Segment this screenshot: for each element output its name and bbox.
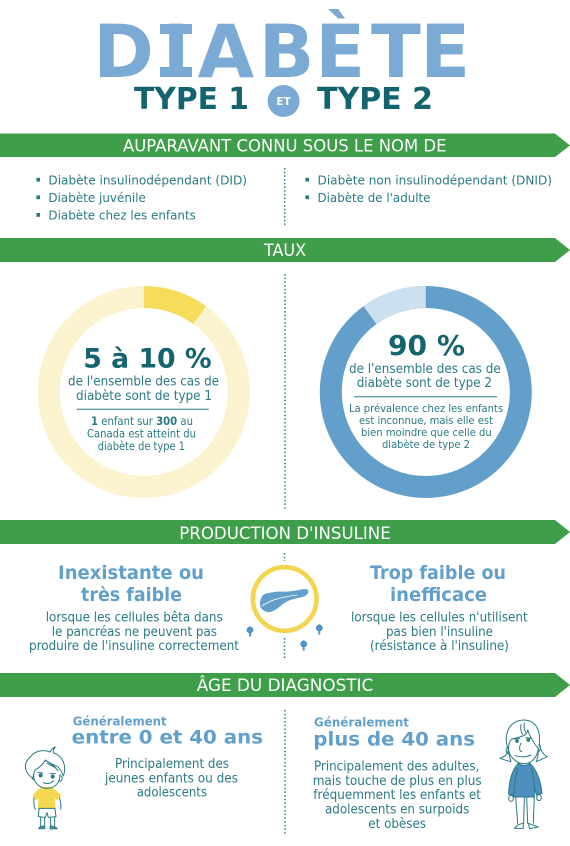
icon: insulin drop bottom xyxy=(300,640,307,650)
text: share of cases type 2 xyxy=(349,362,501,391)
heading: trop faible ou inefficace xyxy=(370,562,506,606)
text: principally adults: et obèses xyxy=(368,817,426,832)
text: prevalence type 1: diabète de type 1 xyxy=(98,439,185,453)
icon: boy xyxy=(25,747,65,829)
text: prevalence type 2 xyxy=(349,402,503,451)
subtitle: type 1: TYPE 1 xyxy=(134,82,249,117)
text: principally children: Principalement des xyxy=(115,757,229,772)
text: principally adults: mais touche de plus en plus xyxy=(313,774,482,789)
badge: et: ET xyxy=(276,96,292,108)
icon: woman xyxy=(500,720,547,829)
heading: trop faible ou inefficace: Trop faible ou xyxy=(370,562,506,584)
panel: insulin type 1 xyxy=(29,562,239,654)
text: share of cases type 1: diabète sont de type 1 xyxy=(76,388,212,404)
text: cause type 2 xyxy=(351,611,528,654)
subtitle: type 2: TYPE 2 xyxy=(317,82,433,117)
text: principally adults: fréquemment les enfants et xyxy=(313,788,481,803)
panel: former names type 2: Diabète de l'adulte xyxy=(318,191,431,206)
text: prevalence type 2: diabète de type 2 xyxy=(382,438,470,451)
icon: insulin drop right xyxy=(316,624,323,634)
text: cause type 2: lorsque les cellules n'utilisent xyxy=(351,611,528,626)
heading: inexistante ou très faible: Inexistante ou xyxy=(58,562,204,584)
text: prevalence type 1: Canada est atteint du xyxy=(87,426,196,440)
heading: inexistante ou très faible: très faible xyxy=(81,584,182,606)
text: principally children xyxy=(104,757,238,801)
text: cause type 1 xyxy=(29,611,239,654)
banner: auparavant connu sous le nom de xyxy=(0,134,570,157)
text: cause type 1: produire de l'insuline correctement xyxy=(29,639,239,654)
panel: former names type 2 xyxy=(305,174,552,206)
title: DIABÈTE: DIABÈTE xyxy=(93,9,470,95)
text: principally adults xyxy=(313,760,482,832)
label: généralement: Généralement xyxy=(73,714,167,729)
icon: insulin drop left xyxy=(246,626,254,636)
text: share of cases type 2: de l'ensemble des cas de xyxy=(349,362,501,377)
banner: production d'insuline: PRODUCTION D'INSULINE xyxy=(179,524,391,544)
banner: taux: TAUX xyxy=(263,241,306,261)
banner: âge du diagnostic: ÂGE DU DIAGNOSTIC xyxy=(197,674,373,696)
text: cause type 2: (résistance à l'insuline) xyxy=(370,639,509,654)
text: principally children: adolescents xyxy=(137,786,207,801)
heading: inexistante ou très faible xyxy=(58,562,204,606)
panel: former names type 1 xyxy=(36,174,247,224)
panel: former names type 2: Diabète non insulinodépendant (DNID) xyxy=(318,174,552,188)
panel: age type 1 xyxy=(72,714,263,801)
heading: plus de 40 ans: plus de 40 ans xyxy=(313,730,475,751)
banner: âge du diagnostic xyxy=(0,673,570,697)
text: prevalence type 1 xyxy=(87,414,196,453)
stat: 90 %: 90 % xyxy=(388,329,465,362)
text: prevalence type 1: 1 enfant sur 300 au xyxy=(91,414,193,428)
panel: former names type 1: Diabète insulinodépendant (DID) xyxy=(48,174,247,188)
text: share of cases type 1: de l'ensemble des cas de xyxy=(68,375,219,390)
banner: production d'insuline xyxy=(0,520,570,544)
panel: age type 2 xyxy=(313,715,482,832)
banner: auparavant connu sous le nom de: AUPARAVANT CONNU SOUS LE NOM DE xyxy=(123,136,446,156)
text: cause type 1: lorsque les cellules bêta dans xyxy=(46,611,223,626)
text: cause type 2: pas bien l'insuline xyxy=(386,625,493,640)
text: cause type 1: le pancréas ne peuvent pas xyxy=(52,625,217,640)
heading: entre 0 et 40 ans: entre 0 et 40 ans xyxy=(72,727,263,748)
title block xyxy=(93,9,470,117)
text: principally adults: Principalement des adultes, xyxy=(314,760,479,775)
panel: former names type 1: Diabète chez les enfants xyxy=(48,208,196,224)
stat: 5 à 10 %: 5 à 10 % xyxy=(83,344,212,375)
text: prevalence type 2: bien moindre que celle du xyxy=(361,426,492,439)
donut chart: type 1 xyxy=(49,286,239,487)
text: principally adults: adolescents en surpoids xyxy=(325,803,470,818)
text: share of cases type 2: diabète sont de type 2 xyxy=(357,375,492,391)
donut chart: type 2 xyxy=(331,286,521,487)
banner: taux xyxy=(0,238,570,262)
icon: pancreas in circle xyxy=(253,567,316,631)
heading: trop faible ou inefficace: inefficace xyxy=(390,584,487,606)
panel: insulin type 2 xyxy=(351,562,528,654)
badge: et xyxy=(268,85,300,117)
text: prevalence type 2: est inconnue, mais elle est xyxy=(359,414,494,427)
label: généralement: Généralement xyxy=(314,715,409,730)
panel: former names type 1: Diabète juvénile xyxy=(48,191,146,206)
text: share of cases type 1 xyxy=(68,375,219,404)
text: prevalence type 2: La prévalence chez les enfants xyxy=(349,402,503,415)
text: principally children: jeunes enfants ou des xyxy=(104,771,238,786)
